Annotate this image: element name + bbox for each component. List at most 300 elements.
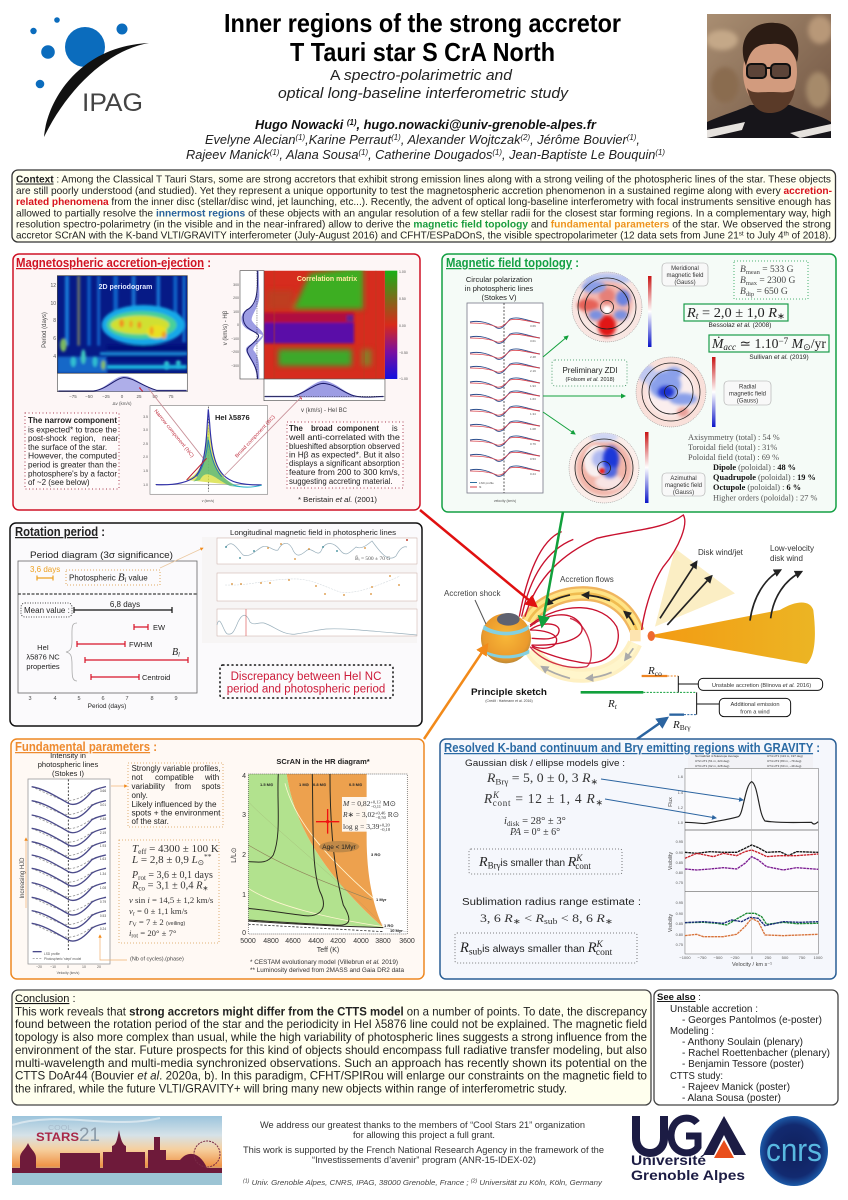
callout: RBrg smaller: K xyxy=(575,853,583,863)
callout: variable profiles: from xyxy=(175,782,191,791)
authors: (2) xyxy=(520,133,530,142)
callout: narrow component: post-shock xyxy=(28,434,68,443)
label: circular polarization xyxy=(465,275,533,302)
chart: Stokes I profiles: LSD profile xyxy=(44,952,60,956)
text: field statistics: Poloidal field (total) : 69 % xyxy=(688,453,779,462)
principle sketch: R xyxy=(673,719,680,731)
logo: Cool Stars 21: STARS xyxy=(36,1130,79,1144)
callout: stellar parameters: (veiling) xyxy=(166,921,185,927)
chart: correlation matrix: v (km/s) - Hβ xyxy=(223,310,229,345)
text: sublimation xyxy=(462,897,641,926)
chart: HR diagram: M⊙ xyxy=(381,799,396,808)
formulas: radii: disk xyxy=(507,819,520,828)
callout: stellar parameters: R xyxy=(131,880,139,892)
accretion flows xyxy=(528,594,641,675)
callout: preliminary ZDI: Preliminary ZDI xyxy=(562,366,618,375)
panel: see also xyxy=(654,990,838,1105)
chart: correlation matrix: 1.00 xyxy=(399,270,406,274)
label: meridional magnetic field: (Gauss) xyxy=(674,280,696,286)
panel: see also: - Benjamin Tessore (poster) xyxy=(682,1058,804,1070)
label: intensity: Intensity in xyxy=(50,751,86,760)
text: gaussian models: Gaussian disk / ellipse models give : xyxy=(465,758,625,768)
formulas: radii xyxy=(483,770,603,838)
chart: 2D periodogram: 12 xyxy=(50,283,56,289)
callout: stellar parameters: rot xyxy=(131,934,138,940)
chart: 2D periodogram: −75 xyxy=(69,394,77,399)
chart: He I 5876 profile: v (km/s) xyxy=(202,499,214,503)
panel: rotation period xyxy=(10,523,422,726)
callout: stellar parameters: = 20° ± 7° xyxy=(138,928,177,938)
label: period diagram: Period diagram (3σ significance) xyxy=(30,550,173,561)
label: intensity xyxy=(38,751,98,778)
text: field statistics: Quadrupole (poloidal) : 19 % xyxy=(713,473,816,482)
chart: HR diagram: 4000 xyxy=(353,938,369,945)
label: radial magnetic field: (Gauss) xyxy=(737,398,758,404)
principle sketch xyxy=(444,515,823,732)
chart: GRAVITY flux and visibility: Visibility xyxy=(668,852,674,870)
chart: He I 5876 profile: Narrow component (NC) xyxy=(152,408,195,459)
authors: (1) xyxy=(358,148,368,157)
arrows: radii to flux xyxy=(601,779,743,818)
note: cycles phase: (Nb of cycles).(phase) xyxy=(130,956,184,962)
heading: fundamental parameters: Fundamental parameters : xyxy=(15,740,157,754)
chart: HR diagram: +0,46 xyxy=(375,810,386,816)
callout: stellar parameters: = 4300 ± 100 K xyxy=(146,843,219,855)
principle sketch: Disk wind/jet xyxy=(698,548,744,557)
chart: GRAVITY flux and visibility: 0.75 xyxy=(676,943,683,947)
callout: broad component: suggesting accreting material. xyxy=(289,477,393,486)
callout: mass accretion rate xyxy=(709,335,829,361)
panel: conclusion: Conclusion : xyxy=(15,993,76,1005)
panel: context: accretor SCrAN with the K-band VLTI/GRAVITY interferometer (July-August 2016) and CFHT/ESPaDOnS, the visible spectropolarimeter (12 data sets from June 21 xyxy=(16,230,762,242)
panel: conclusion: CTTS DoAr44 (Bouvier et al. 2020a, b). In this paradigm, CFHT/SPIRou will enlarge our constraints on the magnetic field to xyxy=(15,1068,647,1082)
chart: period diagram: Period (days) xyxy=(88,703,126,710)
chart: HR diagram: −0,18 xyxy=(380,827,391,833)
magnetic field lines xyxy=(519,515,685,667)
chart: correlation matrix: 100 xyxy=(233,310,239,314)
panel: context: related phenomena from the inner disc (stellar/disc wind, jet launching, etc...). Recently, the advent of optical long-baseline interferometry with focal instruments sensitive enough has xyxy=(16,197,831,208)
chart: HR diagram: 0 xyxy=(242,930,246,937)
callout: stellar parameters: eff xyxy=(138,847,147,856)
callout: variable profiles: compatible xyxy=(155,773,194,782)
arrow: HJD xyxy=(25,838,27,908)
callout: narrow component: is expected* to trace the xyxy=(28,426,118,434)
chart: He I 5876 profile xyxy=(143,388,302,503)
chart: 2D periodogram: 4 xyxy=(53,354,56,360)
chart: HR diagram: log g = 3,39 xyxy=(343,822,379,831)
callout: mass accretion rate: acc xyxy=(723,342,736,352)
logo: Cool Stars 21 xyxy=(12,1116,222,1185)
panel: context: of 2018). xyxy=(789,230,831,242)
chart: period diagram xyxy=(18,561,197,710)
callout: B values xyxy=(734,261,808,299)
label: meridional magnetic field: Meridional xyxy=(671,266,699,272)
note: cycles phase xyxy=(100,935,184,962)
chart: Stokes V profiles: velocity (km/s) xyxy=(494,499,516,503)
panel: resolved K-band xyxy=(440,739,836,979)
chart: 2D periodogram: 50 xyxy=(152,394,158,399)
callout: Rsub smaller xyxy=(455,933,637,963)
callout: stellar parameters: = 3,6 ± 0,1 days xyxy=(146,870,213,881)
chart: HR diagram: 3600 xyxy=(399,938,415,945)
heading: longitudinal field: Longitudinal magnetic field in photospheric lines xyxy=(230,528,396,537)
principle sketch: Accretion shock xyxy=(444,589,501,598)
callout: mass accretion rate: ⊙ xyxy=(803,342,811,352)
colorbars xyxy=(645,276,716,503)
affiliations: (1) xyxy=(243,1178,250,1184)
callout: stellar parameters: ⊙ xyxy=(198,858,204,867)
callout: Rsub smaller: R xyxy=(587,940,597,956)
label: azimuthal magnetic field: (Gauss) xyxy=(673,490,694,496)
chart: GRAVITY flux and visibility: 1.6 xyxy=(678,775,683,779)
chart: Stokes I profiles: Velocity (km/s) xyxy=(57,971,79,975)
callout: stellar parameters: r xyxy=(129,917,133,927)
formulas: radii: R xyxy=(486,770,495,785)
chart: period diagram: 9 xyxy=(174,696,178,702)
formulas: radii: R xyxy=(581,770,591,785)
chart: Stokes I profiles: 0 xyxy=(67,965,69,969)
chart: Stokes I profiles: 1.34 xyxy=(100,872,106,876)
panel: context: th xyxy=(784,230,789,238)
panel: magnetic field topology xyxy=(442,254,836,512)
callout: narrow component: region, xyxy=(71,434,95,443)
subtitle: A spectro-polarimetric and xyxy=(330,68,513,84)
chart: correlation matrix: 0.50 xyxy=(399,297,406,301)
callout: narrow component: period is greater than the xyxy=(28,460,118,470)
chart: period diagram: 8 xyxy=(150,696,154,702)
callout: B values: B xyxy=(740,276,746,286)
callout: stellar parameters: r xyxy=(133,912,135,918)
panel: conclusion: topology is also more complex than usual, while the high variability of photospheric lines suggests a strong influence from the xyxy=(15,1030,647,1044)
callout: variable profiles: Strongly variable profiles, xyxy=(132,764,220,773)
chart: HR diagram: 4600 xyxy=(285,938,301,945)
logo: IPAG xyxy=(30,17,149,137)
callout: stellar parameters xyxy=(119,840,219,943)
chart: HR diagram: 4200 xyxy=(330,938,346,945)
chart: period diagram: l xyxy=(178,652,180,658)
callout: broad component: well anti-correlated with the xyxy=(288,433,400,442)
formulas: radii: Brγ xyxy=(495,776,509,786)
panel: fundamental parameters xyxy=(11,739,424,979)
callout: stellar parameters: ** xyxy=(204,852,212,861)
authors: (1) xyxy=(270,148,280,157)
principle sketch: Brγ xyxy=(680,723,691,732)
chart: period diagram: 5 xyxy=(77,696,81,702)
chart: correlation matrix: v (km/s) - HeI BC xyxy=(301,408,348,414)
chart: HR diagram: 2 xyxy=(242,852,246,859)
chart: HR diagram: −0,50 xyxy=(375,815,387,821)
callout: B values: mean xyxy=(746,269,761,276)
callout: variable profiles: spots + the environment xyxy=(132,808,221,818)
callout: mass accretion rate: /yr xyxy=(811,336,827,351)
callout: narrow component xyxy=(25,413,119,489)
chart: GRAVITY flux and visibility: UT4-UT2 (80 m, −79 deg) xyxy=(767,759,801,763)
authors: , Alexander Wojtczak xyxy=(401,132,522,147)
chart: longitudinal field panels xyxy=(202,537,417,643)
text: field statistics xyxy=(688,433,817,502)
chart: 2D periodogram: 75 xyxy=(168,394,174,399)
panel: conclusion: the infrared, while the future VLTI/GRAVITY+ will bring many new objects within range of interferometric study. xyxy=(15,1082,567,1096)
callout: variable profiles: of the star. xyxy=(132,817,169,826)
formulas: radii: R xyxy=(585,791,595,806)
authors: (1) xyxy=(492,148,502,157)
logo: IPAG: IPAG xyxy=(82,89,143,117)
label: circular polarization: (Stokes V) xyxy=(481,293,517,302)
acknowledgement text xyxy=(243,1120,604,1165)
chart: GRAVITY flux and visibility: −750 xyxy=(697,955,707,960)
text: field statistics: Higher orders (poloidal) : 27 % xyxy=(713,494,817,502)
title xyxy=(224,8,621,67)
chart: GRAVITY flux and visibility: 1.2 xyxy=(678,806,683,810)
callout: truncation radius: ∗ xyxy=(777,311,785,321)
label: meridional magnetic field xyxy=(662,263,708,286)
chart: GRAVITY flux and visibility: 750 xyxy=(799,955,806,960)
callout: stellar parameters: v xyxy=(129,906,133,916)
arrow: blue to radius xyxy=(637,718,667,739)
acknowledgement text: “Investissements d’avenir” program (ANR-15-IDEX-02) xyxy=(312,1155,536,1165)
chart: period diagram: 6,8 days xyxy=(110,600,140,609)
chart: Stokes I profiles xyxy=(28,779,110,975)
panel: see also: See also : xyxy=(657,992,701,1003)
callout: broad component xyxy=(287,422,403,488)
formulas: radii: = 28° ± 3° xyxy=(519,816,566,827)
chart: Stokes I profiles: −10 xyxy=(50,965,56,969)
authors: , Alana Sousa xyxy=(279,147,358,162)
formulas: radii: cont xyxy=(493,798,511,808)
callout: truncation radius: R xyxy=(767,305,778,320)
chart: period diagram: 7 xyxy=(125,696,129,702)
label: intensity: (Stokes I) xyxy=(52,769,85,778)
callout: broad component: displays a significant absorption xyxy=(289,459,400,468)
map: radial field xyxy=(636,357,706,427)
callout: preliminary ZDI xyxy=(552,360,627,386)
affiliations: Univ. Grenoble Alpes, CNRS, IPAG, 38000 Grenoble, France ; xyxy=(249,1178,471,1187)
map: azimuthal field xyxy=(569,432,639,503)
chart: period diagram: λ5876 NC xyxy=(26,652,60,662)
authors: (1) xyxy=(627,133,637,142)
panel: see also: - Rajeev Manick (poster) xyxy=(682,1081,790,1093)
chart: period diagram: FWHM xyxy=(129,640,152,649)
callout: mass accretion rate: M xyxy=(791,336,804,351)
callout: truncation radius: t xyxy=(696,311,699,321)
citation: Beristain: * Beristain et al. (2001) xyxy=(298,495,378,504)
chart: GRAVITY flux and visibility: 0.90 xyxy=(676,851,683,855)
chart: period diagram: Centroid xyxy=(142,673,170,682)
panel: see also: - Georges Pantolmos (e-poster) xyxy=(682,1014,822,1026)
callout: stellar parameters: L = 2,8 ± 0,9 L xyxy=(132,854,198,866)
chart: Stokes V profiles: 0.24 xyxy=(530,472,536,476)
chart: correlation matrix: −100 xyxy=(231,337,239,341)
panel: context: resolution spectro-polarimetry (in the visible and in the near-infrared) allow to derive the magnetic field topology and fundamental parameters of the star. We observed the strong xyxy=(16,220,831,230)
chart: He I 5876 profile: 3.0 xyxy=(143,428,148,432)
label: azimuthal magnetic field: magnetic field xyxy=(665,483,702,489)
authors: Rajeev Manick xyxy=(186,147,271,162)
callout: stellar parameters: v sin i = 14,5 ± 1,2 km/s xyxy=(129,895,214,905)
heading: resolved K-band: Resolved K-band continuum and Brγ emitting regions with GRAVITY : xyxy=(444,741,820,755)
chart: Stokes I profiles: 0.53 xyxy=(100,914,106,918)
callout: B values: B xyxy=(740,265,746,275)
callout: variable profiles xyxy=(128,763,223,827)
chart: GRAVITY flux and visibility: −1000 xyxy=(679,955,691,960)
radii bars xyxy=(581,676,823,717)
chart: correlation matrix: −1.00 xyxy=(399,377,408,381)
label: circular polarization: Circular polarization xyxy=(466,275,532,284)
panel: see also: Unstable accretion : xyxy=(670,1003,758,1015)
chart: HR diagram: 1.5 M⊙ xyxy=(260,782,274,787)
text: sublimation: < xyxy=(521,913,536,925)
chart: Stokes I profiles: 0.79 xyxy=(100,900,106,904)
callout: truncation radius: Bessolaz et al. (2008) xyxy=(709,322,771,329)
chart: Stokes V profiles: 1.08 xyxy=(530,427,536,431)
callout: stellar parameters: i xyxy=(129,928,132,938)
principle sketch: Additional emission xyxy=(730,702,780,708)
chart: He I 5876 profile: 3.5 xyxy=(143,415,148,419)
chart: GRAVITY flux and visibility: Normalized 4-Telescope Average xyxy=(695,754,739,758)
formulas: radii: i xyxy=(504,816,507,827)
chart: Stokes I profiles: −20 xyxy=(36,965,42,969)
text: sublimation: sub xyxy=(544,917,557,926)
chart: 2D periodogram: 8 xyxy=(53,318,56,324)
callout: variable profiles: Likely influenced by the xyxy=(132,800,217,809)
chart: GRAVITY flux and visibility: 0.75 xyxy=(676,881,683,885)
chart: GRAVITY flux and visibility: Visibility xyxy=(668,914,674,932)
callout: mass accretion rate: Ṁ xyxy=(711,336,724,351)
principle sketch: co xyxy=(655,669,662,678)
text: field statistics: Toroidal field (total) : 31% xyxy=(688,443,777,452)
chart: correlation matrix: −0.50 xyxy=(399,351,408,355)
chart: period diagram: 6 xyxy=(101,696,105,702)
callout: Rsub smaller: cont xyxy=(596,948,613,958)
chart: 2D periodogram: 2D periodogram xyxy=(99,284,152,291)
text: sublimation: Sublimation radius range estimate : xyxy=(462,897,641,908)
heading: magnetic field topology: Magnetic field topology : xyxy=(446,256,579,270)
acknowledgement text: We address our greatest thanks to the members of “Cool Stars 21” organization xyxy=(260,1120,585,1130)
chart: period diagram: 4 xyxy=(53,696,57,702)
chart: GRAVITY flux and visibility: 0.90 xyxy=(676,912,683,916)
chart: GRAVITY flux and visibility: Velocity / km s⁻¹ xyxy=(732,962,772,968)
principle sketch: t xyxy=(615,702,618,711)
chart: period diagram: B xyxy=(172,647,178,658)
logo: Cool Stars 21: 21 xyxy=(79,1125,100,1146)
principle sketch: Low-velocity xyxy=(770,544,814,553)
chart: HR diagram: SCrAN in the HR diagram* xyxy=(276,757,370,766)
callout: discrepancy xyxy=(220,665,393,698)
chart: Stokes V profiles: 0.79 xyxy=(530,442,536,446)
chart: Stokes V profiles: LSD profile xyxy=(479,481,494,485)
chart: Stokes I profiles: 20 xyxy=(97,965,101,969)
chart: correlation matrix: 300 xyxy=(233,283,239,287)
wind cone xyxy=(655,548,735,627)
principle sketch: disk wind xyxy=(770,554,803,563)
chart: Stokes V profiles: 2.19 xyxy=(530,369,536,373)
chart: 2D periodogram: Period (days) xyxy=(42,312,48,348)
principle sketch: R xyxy=(648,665,655,677)
chart: GRAVITY flux and visibility: 0.95 xyxy=(676,840,683,844)
chart: Stokes I profiles: 3.66 xyxy=(100,789,106,793)
chart: HR diagram: Teff (K) xyxy=(317,947,339,954)
callout: narrow component: the surface of the star. xyxy=(28,443,107,452)
chart: Stokes V profiles: 3.66 xyxy=(530,324,536,328)
panel: context: st xyxy=(739,230,744,238)
chart: HR diagram: 1 M⊙ xyxy=(299,782,310,787)
chart: period diagram: properties xyxy=(26,662,60,671)
principle sketch: Accretion flows xyxy=(560,575,614,584)
panel: context: are still poorly understood (and studied). Yet they represent a unique opportunity to test the magnetospheric accretion phenomenon in a sustained regime along with every accretion- xyxy=(16,186,833,197)
callout: truncation radius xyxy=(684,304,788,329)
chart: GRAVITY flux and visibility: −500 xyxy=(713,955,723,960)
formulas: radii: R xyxy=(483,791,493,806)
subtitle xyxy=(278,68,569,102)
chart: GRAVITY flux and visibility: −250 xyxy=(730,955,740,960)
label: radial magnetic field: Radial xyxy=(739,384,756,390)
chart: He I 5876 profile: Broad component (BC) xyxy=(234,414,277,459)
authors: , Jean-Baptiste Le Bouquin xyxy=(502,147,655,162)
callout: variable profiles: only. xyxy=(132,791,148,800)
text: sublimation: ∗ xyxy=(605,917,613,926)
callout: variable profiles: variability xyxy=(132,782,165,791)
panel: magnetospheric accretion-ejection xyxy=(13,254,420,510)
logo: UGA: Université xyxy=(631,1152,706,1168)
chart: correlation matrix: −200 xyxy=(231,350,239,354)
chart: Stokes V profiles: 3.01 xyxy=(530,339,536,343)
connector: Bl box to chart xyxy=(160,548,203,568)
callout: Rsub smaller: R xyxy=(459,940,469,956)
callout: B values: dip xyxy=(746,291,754,298)
text: sublimation: < 8, 6 xyxy=(557,913,596,925)
callout: truncation radius: R xyxy=(686,305,697,320)
callout: narrow component: near xyxy=(102,434,118,443)
chart: Stokes V profiles: 1.63 xyxy=(530,397,536,401)
chart: 2D periodogram: −25 xyxy=(102,394,110,399)
callout: B values: B xyxy=(740,287,746,297)
callout: Rsub smaller: is always smaller than xyxy=(482,943,588,955)
principle sketch: R xyxy=(608,698,615,710)
callout: stellar parameters: ∗ xyxy=(203,884,208,892)
label: intensity: photospheric lines xyxy=(38,760,98,769)
subtitle: optical long-baseline interferometric study xyxy=(278,86,569,102)
label: radial magnetic field xyxy=(724,381,771,405)
callout: B values: = 2300 G xyxy=(757,276,795,286)
flow arrows xyxy=(546,595,634,625)
callout: narrow component: photosphere's by a factor xyxy=(28,470,117,478)
chart: He I 5876 profile: 1.5 xyxy=(143,469,148,473)
principle sketch: from a wind xyxy=(740,710,770,716)
arrow: green to star xyxy=(542,512,563,626)
panel: conclusion: found between the rotation period of the star and the periodicity in HeI λ5876 line could not be explained. The magnetic field xyxy=(15,1017,647,1031)
chart: GRAVITY flux and visibility: UT4-UT3 (60 m, −49 deg) xyxy=(767,764,801,768)
callout: stellar parameters: R xyxy=(195,880,203,892)
callout: mass accretion rate: −7 xyxy=(778,336,789,346)
formulas: radii: PA = 0° ± 6° xyxy=(509,827,560,838)
chart: Stokes I profiles: 1.08 xyxy=(100,886,106,890)
chart: HR diagram: 3 R⊙ xyxy=(371,852,381,857)
formulas: radii: ∗ xyxy=(590,776,598,786)
callout: variable profiles: spots xyxy=(202,782,221,791)
panel: conclusion: This work reveals that strong accretors might differ from the CTTS model on a number of points. To date, the discrepancy xyxy=(15,1004,647,1018)
chart: 2D periodogram xyxy=(42,276,187,406)
label: meridional magnetic field: magnetic field xyxy=(666,273,704,279)
panel: context xyxy=(12,170,836,242)
callout: RBrg smaller: cont xyxy=(575,861,591,871)
arrow: to notes xyxy=(111,785,127,787)
chart: GRAVITY flux and visibility: 0.85 xyxy=(676,861,683,865)
chart: HR diagram: R⊙ xyxy=(386,810,399,819)
disk xyxy=(647,602,815,664)
panel: see also: - Rachel Roettenbacher (plenary) xyxy=(682,1047,830,1059)
chart: period diagram: l xyxy=(125,578,127,584)
principle sketch: Principle sketch xyxy=(471,687,547,698)
title: T Tauri star S CrA North xyxy=(290,37,555,67)
